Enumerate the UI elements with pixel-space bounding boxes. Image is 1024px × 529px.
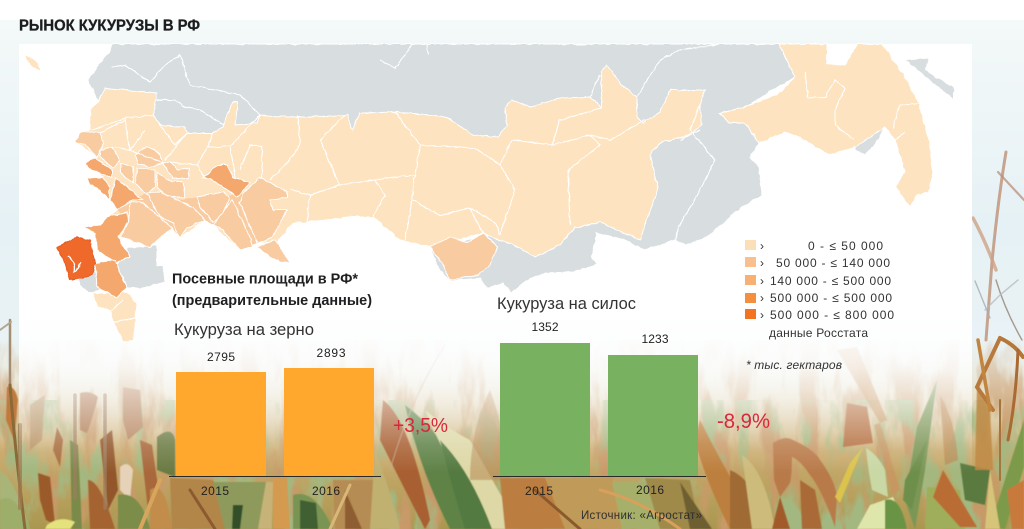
swatch 1: [745, 240, 756, 250]
under first chart: [170, 478, 235, 529]
range 2: 50 000 - ≤ 140 000: [776, 256, 890, 270]
range 4: 500 000 - ≤ 500 000: [770, 291, 892, 305]
value 2795: 2795: [207, 350, 235, 364]
bar chart: grain corn: [169, 320, 448, 498]
bar 2016: [284, 368, 374, 476]
corn tassels and stalks: [0, 152, 1024, 529]
range 5: 500 000 - ≤ 800 000: [770, 308, 894, 322]
bar 2015: [500, 343, 590, 476]
source: Источник: «Агростат»: [581, 510, 702, 522]
swatch 4: [745, 293, 756, 303]
chevrons: ›: [760, 291, 764, 305]
bar 2016: [608, 355, 698, 476]
bar chart: silage corn: [493, 294, 770, 498]
subtitle: Кукуруза на зерно: [174, 320, 314, 339]
value 1233: 1233: [642, 332, 669, 346]
swatch 3: [745, 275, 756, 285]
pale regions 0–50 000: [25, 44, 933, 342]
Azov sliver: [68, 256, 81, 272]
heading line 2: (предварительные данные): [172, 292, 372, 309]
right part: [773, 438, 837, 527]
map of Russia: [25, 44, 954, 342]
heading line 1: Посевные площади в РФ*: [172, 270, 358, 288]
big leaves beside +3,5%: [380, 400, 430, 529]
value 1352: 1352: [532, 320, 559, 334]
title: РЫНОК КУКУРУЗЫ В РФ: [19, 18, 200, 34]
subtitle: Кукуруза на силос: [497, 294, 636, 313]
year 2015: 2015: [201, 484, 229, 498]
year 2016: 2016: [312, 484, 340, 498]
legend note: данные Росстата: [769, 326, 868, 340]
chevrons: ›: [760, 274, 764, 288]
change +3,5%: +3,5%: [393, 415, 448, 437]
internal region borders: [92, 44, 919, 322]
year 2015: 2015: [525, 484, 553, 498]
orange regions 140 000–500 000: [83, 158, 250, 298]
value 2893: 2893: [316, 346, 346, 360]
axis: [169, 476, 381, 477]
footnote: * тыс. гектаров: [746, 358, 842, 372]
legend: [745, 239, 894, 340]
left part: [0, 470, 30, 529]
range 1: 0 - ≤ 50 000: [808, 239, 883, 253]
chart heading: [172, 270, 372, 309]
deep orange region: Krasnodar: [57, 237, 95, 280]
bar 2015: [176, 372, 266, 476]
chevrons: ›: [760, 308, 764, 322]
under second chart: [500, 478, 570, 529]
range 3: 140 000 - ≤ 500 000: [770, 274, 891, 288]
chevrons: ›: [760, 239, 764, 253]
axis: [493, 476, 706, 477]
chevrons: ›: [760, 256, 764, 270]
year 2016: 2016: [636, 483, 664, 497]
underlay of orange zone: [118, 178, 287, 250]
grey regions without data: [77, 44, 954, 293]
swatch 2: [745, 257, 756, 267]
change -8,9%: -8,9%: [717, 410, 770, 433]
background photo: corn field: [0, 152, 1024, 529]
swatch 5: [745, 309, 756, 319]
light orange regions 50 000–140 000: [75, 132, 498, 280]
